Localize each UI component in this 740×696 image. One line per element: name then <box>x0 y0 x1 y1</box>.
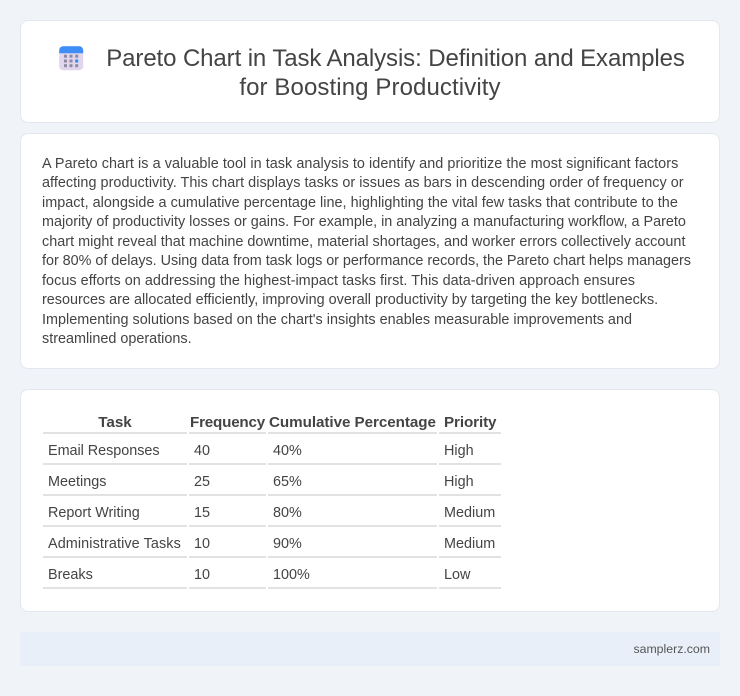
description text: affecting productivity. This chart displays tasks or issues as bars in descending order of frequency or <box>42 175 684 191</box>
row: Breaks <box>43 556 501 589</box>
panel: title card <box>20 20 720 123</box>
title <box>106 45 685 101</box>
table header: Priority <box>444 414 496 431</box>
description text: A Pareto chart is a valuable tool in task analysis to identify and prioritize the most significant factors <box>42 156 678 172</box>
row: Administrative Tasks: Medium <box>444 536 495 552</box>
table header: Frequency <box>190 414 265 431</box>
table header <box>98 414 496 431</box>
footer text: samplerz.com <box>633 642 710 656</box>
row: Email Responses: High <box>444 443 474 459</box>
row: Administrative Tasks: Administrative Tasks <box>48 536 181 552</box>
footer bar <box>20 632 720 666</box>
icon: calendar <box>59 46 84 70</box>
description text: resources are allocated efficiently, improving overall productivity by targeting the key bottlenecks. <box>42 292 658 308</box>
description text: Implementing solutions based on the chart's insights enables measurable improvements and <box>42 312 632 328</box>
row: Breaks: 10 <box>194 567 210 583</box>
description text: for 80% of delays. Using data from task logs or performance records, the Pareto chart helps managers <box>42 253 691 269</box>
table header: Task <box>98 414 132 431</box>
row: Meetings: Meetings <box>48 474 106 490</box>
description text: impact, alongside a cumulative percentage line, highlighting the vital few tasks that contribute to the <box>42 194 678 210</box>
row: Meetings: 65% <box>273 474 302 490</box>
row: Breaks: Low <box>444 567 470 583</box>
row: Report Writing: 15 <box>194 505 210 521</box>
description text: streamlined operations. <box>42 331 192 347</box>
description text: majority of productivity losses or gains. For example, in analyzing a manufacturing workflow, a Pareto <box>42 214 686 230</box>
row: Report Writing <box>43 494 501 521</box>
row: Email Responses: Email Responses <box>48 443 160 459</box>
description text <box>42 156 691 347</box>
panel: description <box>20 133 720 369</box>
row: Meetings <box>43 463 501 490</box>
row: Report Writing: Medium <box>444 505 495 521</box>
table header: Cumulative Percentage <box>269 414 436 431</box>
row: Meetings: 25 <box>194 474 210 490</box>
panel: data table <box>20 389 720 612</box>
row: Email Responses <box>43 432 501 459</box>
row: Email Responses: 40% <box>273 443 302 459</box>
description text: chart might reveal that machine downtime, material shortages, and worker errors collectively account <box>42 234 685 250</box>
row: Meetings: High <box>444 474 474 490</box>
row: Administrative Tasks <box>43 525 501 552</box>
row: Report Writing: 80% <box>273 505 302 521</box>
row: Breaks: 100% <box>273 567 310 583</box>
row: Administrative Tasks: 10 <box>194 536 210 552</box>
description text: focus efforts on addressing the highest-impact tasks first. This data-driven approach ensures <box>42 272 635 288</box>
title: Pareto Chart in Task Analysis: Definition and Examples <box>106 45 685 72</box>
row: Breaks: Breaks <box>48 567 93 583</box>
row: Email Responses: 40 <box>194 443 210 459</box>
row: Report Writing: Report Writing <box>48 505 140 521</box>
title: for Boosting Productivity <box>239 74 501 101</box>
row: Administrative Tasks: 90% <box>273 536 302 552</box>
